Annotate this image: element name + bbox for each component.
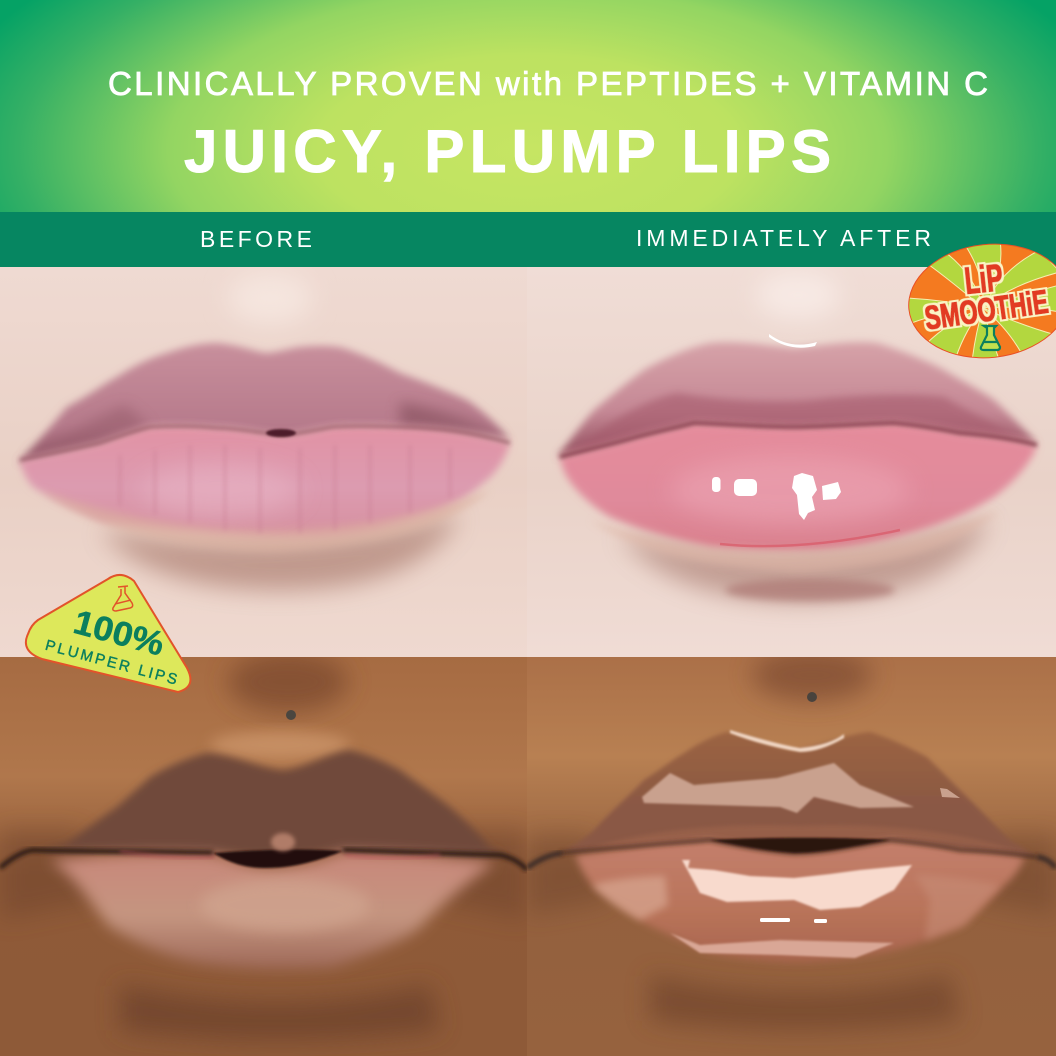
label: before: BEFORE: [200, 226, 312, 252]
title: JUICY, PLUMP LIPS: [184, 118, 831, 185]
photo: after, deep skin: [527, 649, 1056, 1056]
photo: after, light skin: [527, 267, 1056, 657]
badge figure: 100%: [69, 603, 168, 664]
gloss highlights: [642, 763, 914, 813]
photo: before, deep skin: [0, 652, 527, 1056]
header banner: [0, 0, 1056, 212]
badge: 100% plumper lips: [26, 575, 190, 692]
sticker: Lip Smoothie logo: [908, 244, 1056, 358]
sticker word: Lip: LiP: [963, 257, 1005, 303]
photo: before, light skin: [0, 267, 527, 657]
beauty mark: [286, 710, 296, 720]
icon: flask: [113, 586, 133, 611]
label: immediately after: IMMEDIATELY AFTER: [636, 225, 931, 251]
before / after band: [0, 212, 1056, 267]
gloss highlights: [712, 334, 841, 520]
beauty mark: [807, 692, 817, 702]
subheading: CLINICALLY PROVEN with PEPTIDES + VITAMIN C: [108, 65, 988, 102]
badge caption: PLUMPER LIPS: [43, 637, 179, 688]
icon: flask: [981, 326, 1000, 350]
